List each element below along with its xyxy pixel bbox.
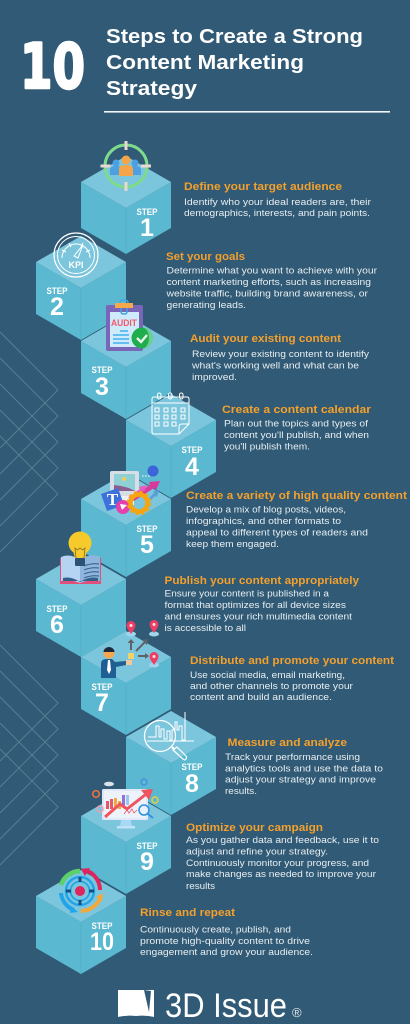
body 2 (165, 266, 378, 311)
body 4: Plan out the topics and types of (224, 418, 368, 430)
step 3 label: STEP (92, 365, 112, 375)
step 8 (126, 711, 383, 815)
step 6 label: STEP (46, 604, 68, 614)
body 2: website traffic, building brand awareness, or (165, 288, 369, 300)
body 9: As you gather data and feedback, use it to (186, 835, 379, 846)
body 8: analytics tools and use the data to (225, 764, 383, 774)
body 6: format that optimizes for all device sizes (164, 600, 346, 611)
body 4 (224, 418, 369, 452)
heading 4: Create a content calendar (222, 404, 372, 416)
body 2: generating leads. (166, 300, 246, 311)
heading 8: Measure and analyze (228, 737, 347, 749)
cube 6 (36, 553, 126, 657)
step 4 label: STEP (182, 445, 202, 455)
body 2: content marketing efforts, such as increasing (166, 277, 371, 288)
body 9 (186, 835, 379, 892)
heading 10: Rinse and repeat (140, 907, 235, 919)
body 10 (140, 924, 313, 958)
step 7 label: STEP (92, 682, 112, 692)
step 2 label (46, 286, 68, 321)
icon: audit clipboard (106, 300, 152, 351)
cube 7 (81, 631, 171, 735)
icon: target audience (100, 141, 151, 191)
step 9 label (136, 841, 158, 876)
step 5 (81, 466, 407, 577)
icon: campaign dashboard (93, 779, 158, 828)
step 3 (81, 300, 369, 419)
heading 1: Define your target audience (184, 181, 342, 193)
icon: content variety: T (107, 490, 119, 509)
icon: content variety (101, 466, 160, 514)
body 5: Develop a mix of blog posts, videos, (186, 504, 346, 516)
body 1 (184, 197, 372, 219)
body 6: Ensure your content is published in a (164, 588, 330, 600)
body 5: appeal to different types of readers and (186, 528, 368, 538)
logo: 3D Issue: 3D Issue (165, 987, 287, 1024)
body 10: Continuously create, publish, and (140, 924, 291, 936)
step 8 label: STEP (182, 762, 202, 772)
body 5: infographics, and other formats to (186, 516, 341, 527)
step 6 label: 6 (50, 611, 64, 639)
step 9 label: 9 (140, 848, 154, 876)
body 6 (164, 588, 352, 634)
step 7 label (92, 682, 112, 717)
body 4: you'll publish them. (224, 442, 310, 452)
step 5 label (136, 524, 158, 559)
step 6 (36, 532, 360, 657)
step 2 label: 2 (50, 293, 64, 321)
body 8 (225, 752, 383, 797)
step 1 label: 1 (140, 214, 154, 242)
body 1: Identify who your ideal readers are, their (184, 197, 372, 208)
body 8: Track your performance using (225, 752, 360, 763)
body 1: demographics, interests, and pain points. (184, 208, 370, 219)
body 9: adjust and refine your strategy. (186, 846, 328, 858)
body 10: engagement and grow your audience. (140, 947, 313, 958)
cube 2 (36, 236, 126, 340)
icon: audit clipboard: AUDIT (111, 318, 137, 329)
step 7 (81, 620, 394, 735)
heading 6: Publish your content appropriately (164, 575, 360, 587)
icon: book and light bulb (60, 532, 101, 584)
step 4 label (182, 445, 202, 481)
step 5 label: STEP (136, 524, 158, 534)
body 7: and other channels to promote your (190, 681, 354, 692)
title text: Content Marketing (106, 52, 304, 74)
step 3 label (92, 365, 112, 401)
heading 5: Create a variety of high quality content (186, 490, 407, 502)
body 10: promote high-quality content to drive (140, 936, 310, 947)
step 2 (36, 233, 378, 340)
cube 3 (81, 315, 171, 419)
heading 2: Set your goals (166, 251, 245, 263)
heading 3: Audit your existing content (190, 333, 341, 345)
step 9 (81, 779, 379, 894)
step 8 label (182, 762, 202, 798)
step 8 label: 8 (185, 770, 199, 798)
body 2: Determine what you want to achieve with your (166, 266, 378, 276)
body 5: keep them engaged. (186, 539, 279, 550)
body 7: Use social media, email marketing, (190, 670, 345, 681)
step 4 (126, 393, 372, 498)
icon: KPI gauge (54, 233, 98, 277)
body 8: results. (225, 786, 257, 797)
icon: KPI gauge: KPI (68, 260, 84, 270)
body 3 (191, 349, 369, 383)
body 6: is accessible to all (164, 623, 246, 634)
body 9: results (186, 881, 215, 892)
body 3: improved. (192, 372, 237, 383)
body 3: Review your existing content to identify (192, 349, 369, 360)
step 4 label: 4 (185, 453, 199, 481)
heading 7: Distribute and promote your content (190, 655, 394, 667)
cube 4 (126, 394, 216, 498)
step 10 (36, 868, 313, 974)
title text: Strategy (106, 78, 198, 100)
icon: repeat cycle target (61, 868, 103, 913)
step 2 label: STEP (46, 286, 68, 296)
title text (106, 26, 363, 100)
body 6: and ensures your rich multimedia content (164, 612, 352, 622)
cube 1 (81, 156, 171, 254)
heading 9: Optimize your campaign (186, 822, 323, 834)
body 4: content you'll publish, and when (224, 430, 369, 441)
cube 9 (81, 790, 171, 894)
cube 5 (81, 473, 171, 577)
body 7: content and build an audience. (190, 692, 332, 703)
body 9: Continuously monitor your progress, and (186, 858, 369, 869)
icon: calendar (152, 393, 189, 434)
step 9 label: STEP (136, 841, 158, 851)
step 10 label: STEP (92, 921, 112, 931)
step 1 label: STEP (136, 207, 158, 217)
step 3 label: 3 (95, 373, 109, 401)
title text: Steps to Create a Strong (106, 26, 363, 48)
icon: analytics magnifier (144, 712, 194, 760)
icon: distribution person and map pins (101, 620, 159, 678)
body 9: make changes as needed to improve your (186, 869, 377, 880)
step 5 label: 5 (140, 531, 154, 559)
cube 10 (36, 870, 126, 974)
logo: 3D Issue: ® (292, 1005, 302, 1020)
body 8: adjust your strategy and improve (225, 774, 376, 786)
title (20, 26, 363, 103)
big number 10: 10 (20, 30, 85, 103)
body 7 (190, 670, 354, 703)
step 1 label (136, 207, 158, 242)
step 6 label (46, 604, 68, 639)
body 3: what's working well and what can be (191, 360, 359, 372)
step 7 label: 7 (95, 689, 109, 717)
step 10 label: 10 (90, 928, 114, 956)
step 1 (81, 141, 372, 254)
body 5 (186, 504, 368, 550)
cube 8 (126, 711, 216, 815)
icon: open book logo (118, 990, 154, 1017)
